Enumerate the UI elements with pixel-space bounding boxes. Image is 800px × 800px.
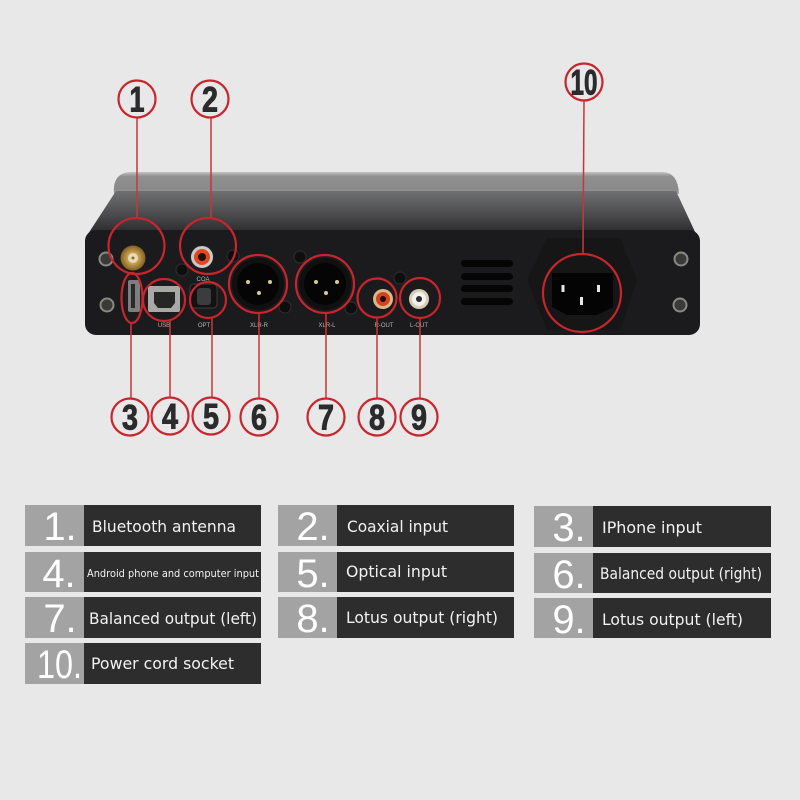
legend item 1: Bluetooth antenna bbox=[92, 517, 236, 536]
USB-B port bbox=[148, 286, 180, 312]
badge 3: 3 bbox=[122, 398, 138, 438]
badge 1: 1 bbox=[130, 80, 144, 120]
device top glass edge bbox=[114, 172, 679, 194]
badge 2: 2 bbox=[202, 80, 218, 120]
legend item 4: Android phone and computer input bbox=[87, 567, 260, 580]
device sloped top bbox=[88, 191, 696, 234]
legend item 7: 7. bbox=[43, 597, 77, 641]
socket labels: USB bbox=[158, 323, 170, 329]
socket labels: XLR-R bbox=[250, 323, 269, 329]
legend item 3 bbox=[534, 506, 771, 550]
SMA antenna connector bbox=[120, 246, 146, 270]
legend item 4: 4. bbox=[42, 552, 76, 596]
legend item 8 bbox=[278, 597, 514, 641]
badge 3 bbox=[112, 398, 148, 438]
small black screws bbox=[176, 250, 634, 314]
legend item 10: 10. bbox=[37, 643, 82, 687]
legend item 5 bbox=[278, 552, 514, 596]
power socket bbox=[552, 273, 613, 315]
XLR right connector bbox=[232, 258, 284, 310]
legend item 6: 6. bbox=[552, 553, 586, 597]
ventilation slots bbox=[461, 260, 513, 305]
legend item 10: Power cord socket bbox=[91, 654, 234, 673]
legend bbox=[25, 505, 771, 687]
legend item 4 bbox=[25, 552, 261, 596]
legend item 6: Balanced output (right) bbox=[600, 564, 762, 583]
badge 4 bbox=[152, 398, 188, 436]
callout leader lines bbox=[131, 101, 584, 398]
red highlight rings bbox=[108, 218, 621, 332]
XLR left connector bbox=[299, 258, 351, 310]
panel screws bbox=[100, 252, 688, 312]
left RCA output bbox=[409, 289, 429, 309]
legend item 5: Optical input bbox=[346, 562, 447, 581]
badge 8 bbox=[358, 398, 396, 438]
badge 5: 5 bbox=[203, 398, 219, 436]
optical port bbox=[190, 284, 217, 308]
legend item 6 bbox=[534, 553, 771, 597]
socket labels bbox=[158, 277, 428, 329]
badge 2 bbox=[192, 80, 228, 120]
socket labels: R-OUT bbox=[374, 323, 394, 329]
legend item 2: Coaxial input bbox=[347, 517, 448, 536]
badge 9 bbox=[400, 398, 438, 438]
socket labels: OPT bbox=[198, 323, 210, 329]
number badges bbox=[112, 64, 602, 438]
badge 5 bbox=[192, 398, 230, 436]
socket labels: XLR-L bbox=[318, 323, 336, 329]
badge 7: 7 bbox=[318, 398, 334, 438]
legend item 3: IPhone input bbox=[602, 518, 702, 537]
badge 7 bbox=[308, 398, 344, 438]
legend item 9: Lotus output (left) bbox=[602, 610, 743, 629]
legend item 7 bbox=[25, 597, 261, 641]
legend item 9 bbox=[534, 598, 771, 642]
right RCA output bbox=[373, 289, 393, 309]
badge 6 bbox=[240, 398, 278, 438]
USB-A port bbox=[128, 280, 140, 312]
coaxial RCA socket bbox=[190, 246, 214, 268]
legend item 1: 1. bbox=[43, 505, 77, 549]
legend item 8: 8. bbox=[296, 597, 330, 641]
legend item 8: Lotus output (right) bbox=[346, 608, 498, 627]
socket labels: COA bbox=[196, 277, 210, 283]
legend item 3: 3. bbox=[552, 506, 586, 550]
socket labels: L-OUT bbox=[410, 323, 428, 329]
badge 4: 4 bbox=[162, 398, 178, 436]
badge 1 bbox=[118, 80, 156, 120]
legend item 9: 9. bbox=[552, 598, 586, 642]
legend item 1 bbox=[25, 505, 261, 549]
badge 6: 6 bbox=[251, 398, 267, 438]
legend item 7: Balanced output (left) bbox=[89, 609, 257, 628]
legend item 10 bbox=[25, 643, 261, 687]
badge 10: 10 bbox=[570, 64, 598, 102]
legend item 2 bbox=[278, 505, 514, 549]
legend item 2: 2. bbox=[296, 505, 330, 549]
power socket mount bbox=[527, 238, 637, 330]
badge 9: 9 bbox=[411, 398, 427, 438]
badge 8: 8 bbox=[369, 398, 385, 438]
device: rear view of audio unit bbox=[85, 172, 700, 335]
device rear panel bbox=[85, 230, 700, 335]
legend item 5: 5. bbox=[296, 552, 330, 596]
